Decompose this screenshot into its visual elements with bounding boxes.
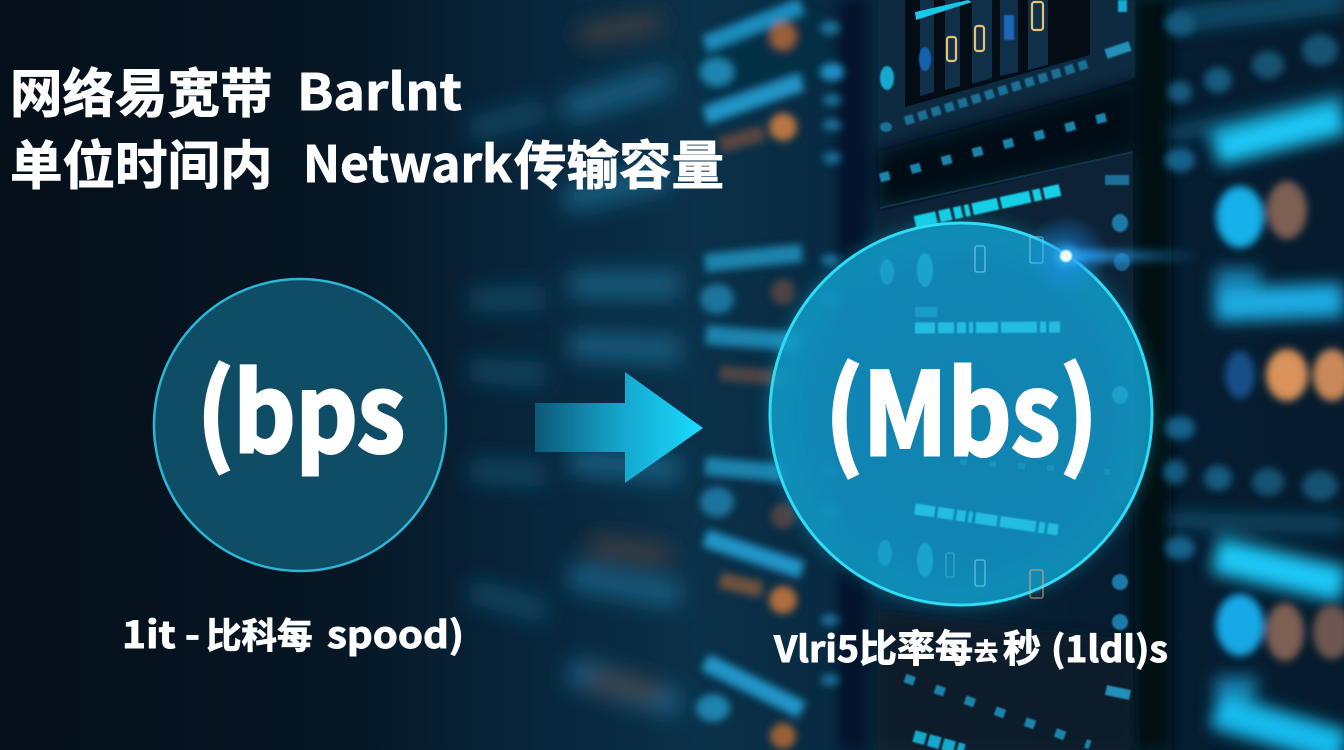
title line 1: [10, 52, 462, 128]
title: [10, 52, 724, 200]
lens flare on circle: [1024, 214, 1201, 298]
label: bps: (bps: [197, 328, 405, 484]
background: mid blurred server column: [696, 6, 830, 749]
caption: bit speed: 1it -: [122, 605, 200, 659]
arrow: bps to Mbps: [535, 372, 703, 483]
caption: Mbps speed: (1ldl)s: [1051, 621, 1168, 673]
circle: Mbs unit: [769, 222, 1153, 606]
caption: bit speed: spood): [327, 605, 464, 659]
server rack: dotted status strip: [880, 112, 1125, 178]
circle: bps unit: [154, 279, 446, 571]
title line 1: 网络易宽带: [10, 52, 273, 128]
caption: Mbps speed: 去: [974, 632, 998, 667]
title line 2: [10, 124, 724, 200]
caption: bit speed: [122, 605, 464, 659]
background: right blurred server column: [1163, 0, 1344, 748]
background: dark vertical gaps: [838, 0, 1171, 750]
server rack: dark band behind dotted strip: [878, 82, 1135, 208]
title line 2: 单位时间内: [10, 124, 273, 200]
background: narrow column of blue lights: [820, 21, 844, 686]
caption: bit speed: 比科每: [206, 608, 313, 659]
title line 2: Netwark: [303, 125, 512, 197]
caption: Mbps speed: [773, 618, 1168, 673]
label: Mbs: (Mbs): [825, 323, 1098, 488]
server rack: middle panel: [878, 152, 1135, 520]
caption: Mbps speed: 秒: [1003, 618, 1041, 673]
background: far blurred server column: [470, 22, 680, 705]
server rack: top sharp panel: [878, 0, 1135, 150]
caption: Mbps speed: 比率每: [859, 618, 973, 673]
circle reflections: server panel seen through glass: [878, 237, 1128, 598]
title line 1: Barlnt: [297, 53, 462, 125]
server rack: bottom panels: [878, 574, 1135, 750]
title line 2: 传输容量: [514, 124, 724, 200]
caption: Mbps speed: Vlri5: [773, 621, 859, 673]
